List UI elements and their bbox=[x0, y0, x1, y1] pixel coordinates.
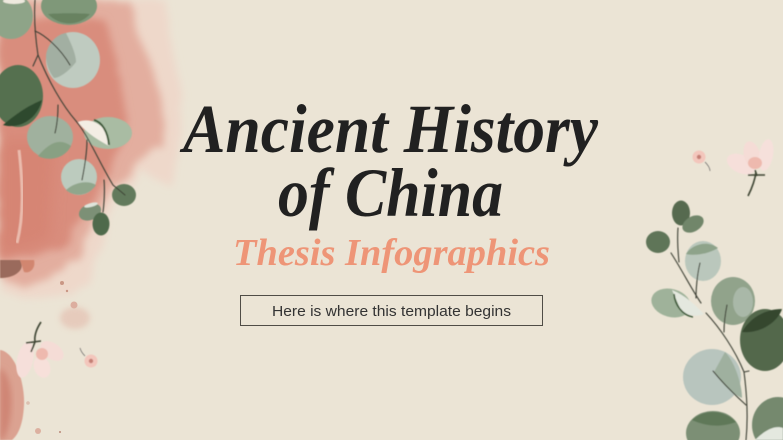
tagline box: Here is where this template begins bbox=[272, 304, 511, 320]
flower: top right bbox=[724, 138, 776, 196]
eucalyptus branch: bottom right bbox=[646, 200, 783, 440]
leaf bbox=[27, 116, 73, 159]
small flower: bottom left bbox=[80, 348, 98, 368]
leaf: curled bbox=[648, 284, 704, 322]
leaf bbox=[61, 159, 97, 195]
title: of China bbox=[278, 155, 503, 231]
leaf bbox=[76, 200, 104, 224]
tagline box bbox=[240, 296, 542, 326]
title: Ancient History bbox=[179, 91, 598, 167]
leaf: lower right bbox=[752, 397, 783, 440]
small flower: top right bbox=[692, 150, 710, 171]
title bbox=[179, 91, 598, 231]
flower: bottom left bbox=[13, 322, 67, 380]
subtitle: Thesis Infographics bbox=[233, 232, 550, 274]
leaf: pale with green top bbox=[685, 241, 721, 281]
leaf: pale large bbox=[683, 349, 742, 405]
eucalyptus branch: top left bbox=[0, 0, 136, 236]
leaf bbox=[0, 0, 33, 39]
stems bbox=[671, 228, 749, 440]
leaf bbox=[711, 277, 755, 325]
leaf: dark bbox=[0, 65, 43, 127]
leaf bbox=[92, 212, 110, 236]
watercolor wash: left bbox=[0, 0, 182, 440]
leaf: bottom bbox=[686, 411, 740, 440]
leaf: pale bbox=[46, 32, 100, 88]
leaf bbox=[672, 200, 690, 226]
leaf bbox=[679, 212, 707, 236]
leaf bbox=[41, 0, 97, 25]
leaf: dark bbox=[740, 309, 783, 371]
leaf bbox=[112, 184, 136, 206]
leaf: curled bbox=[78, 117, 132, 149]
leaf bbox=[646, 231, 670, 253]
stems bbox=[33, 0, 125, 212]
